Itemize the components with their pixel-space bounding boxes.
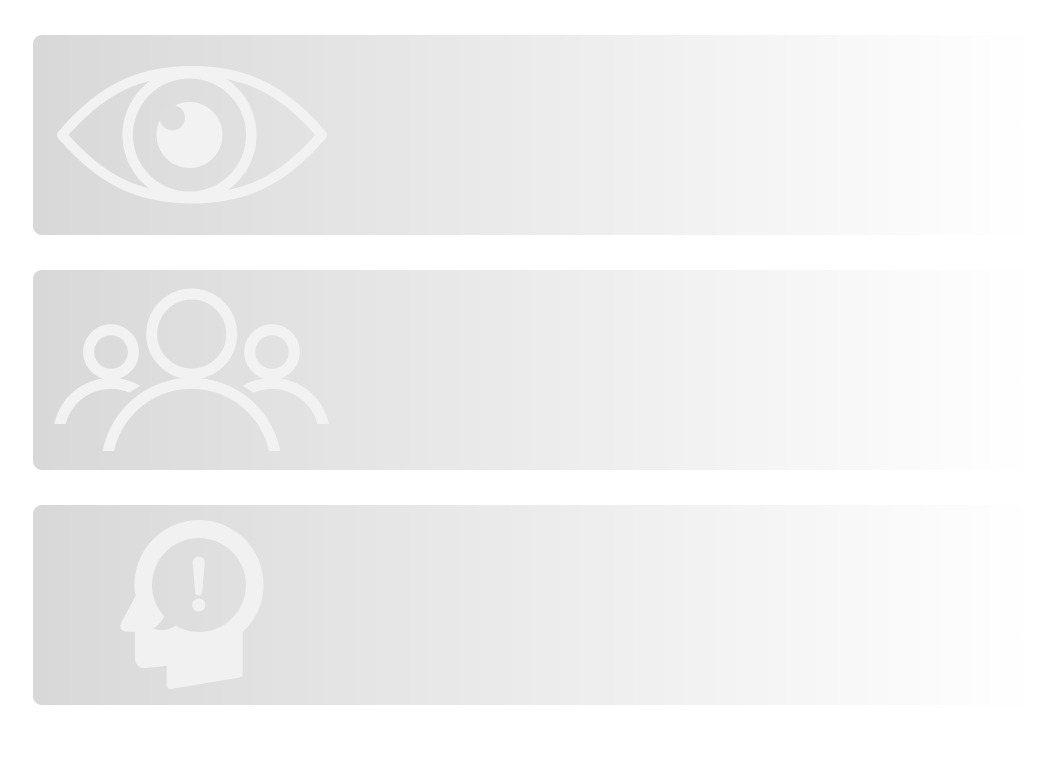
iris ring: [128, 73, 251, 197]
panel background: head: [33, 505, 1033, 705]
left person head: [89, 330, 133, 374]
centre person head: [152, 294, 232, 374]
pupil: [156, 102, 222, 168]
right person shoulders: [243, 378, 328, 424]
pupil highlight: [160, 105, 185, 130]
panel background: eye: [33, 35, 1033, 235]
icon: eye: [62, 71, 322, 198]
icon: head with exclamation speech bubble: [120, 520, 263, 689]
icon: group of people: [54, 288, 328, 451]
eye outline: [62, 71, 322, 198]
head silhouette: [120, 520, 263, 689]
panel: people: [33, 270, 826, 470]
panel: head with alert: [33, 505, 1033, 705]
right person head: [250, 330, 294, 374]
centre person shoulders: [102, 378, 280, 451]
left person shoulders: [54, 378, 140, 424]
exclamation bar: [193, 556, 205, 596]
panel background: people: [33, 270, 1033, 470]
exclamation dot: [192, 598, 205, 612]
panel: eye: [33, 35, 1033, 235]
